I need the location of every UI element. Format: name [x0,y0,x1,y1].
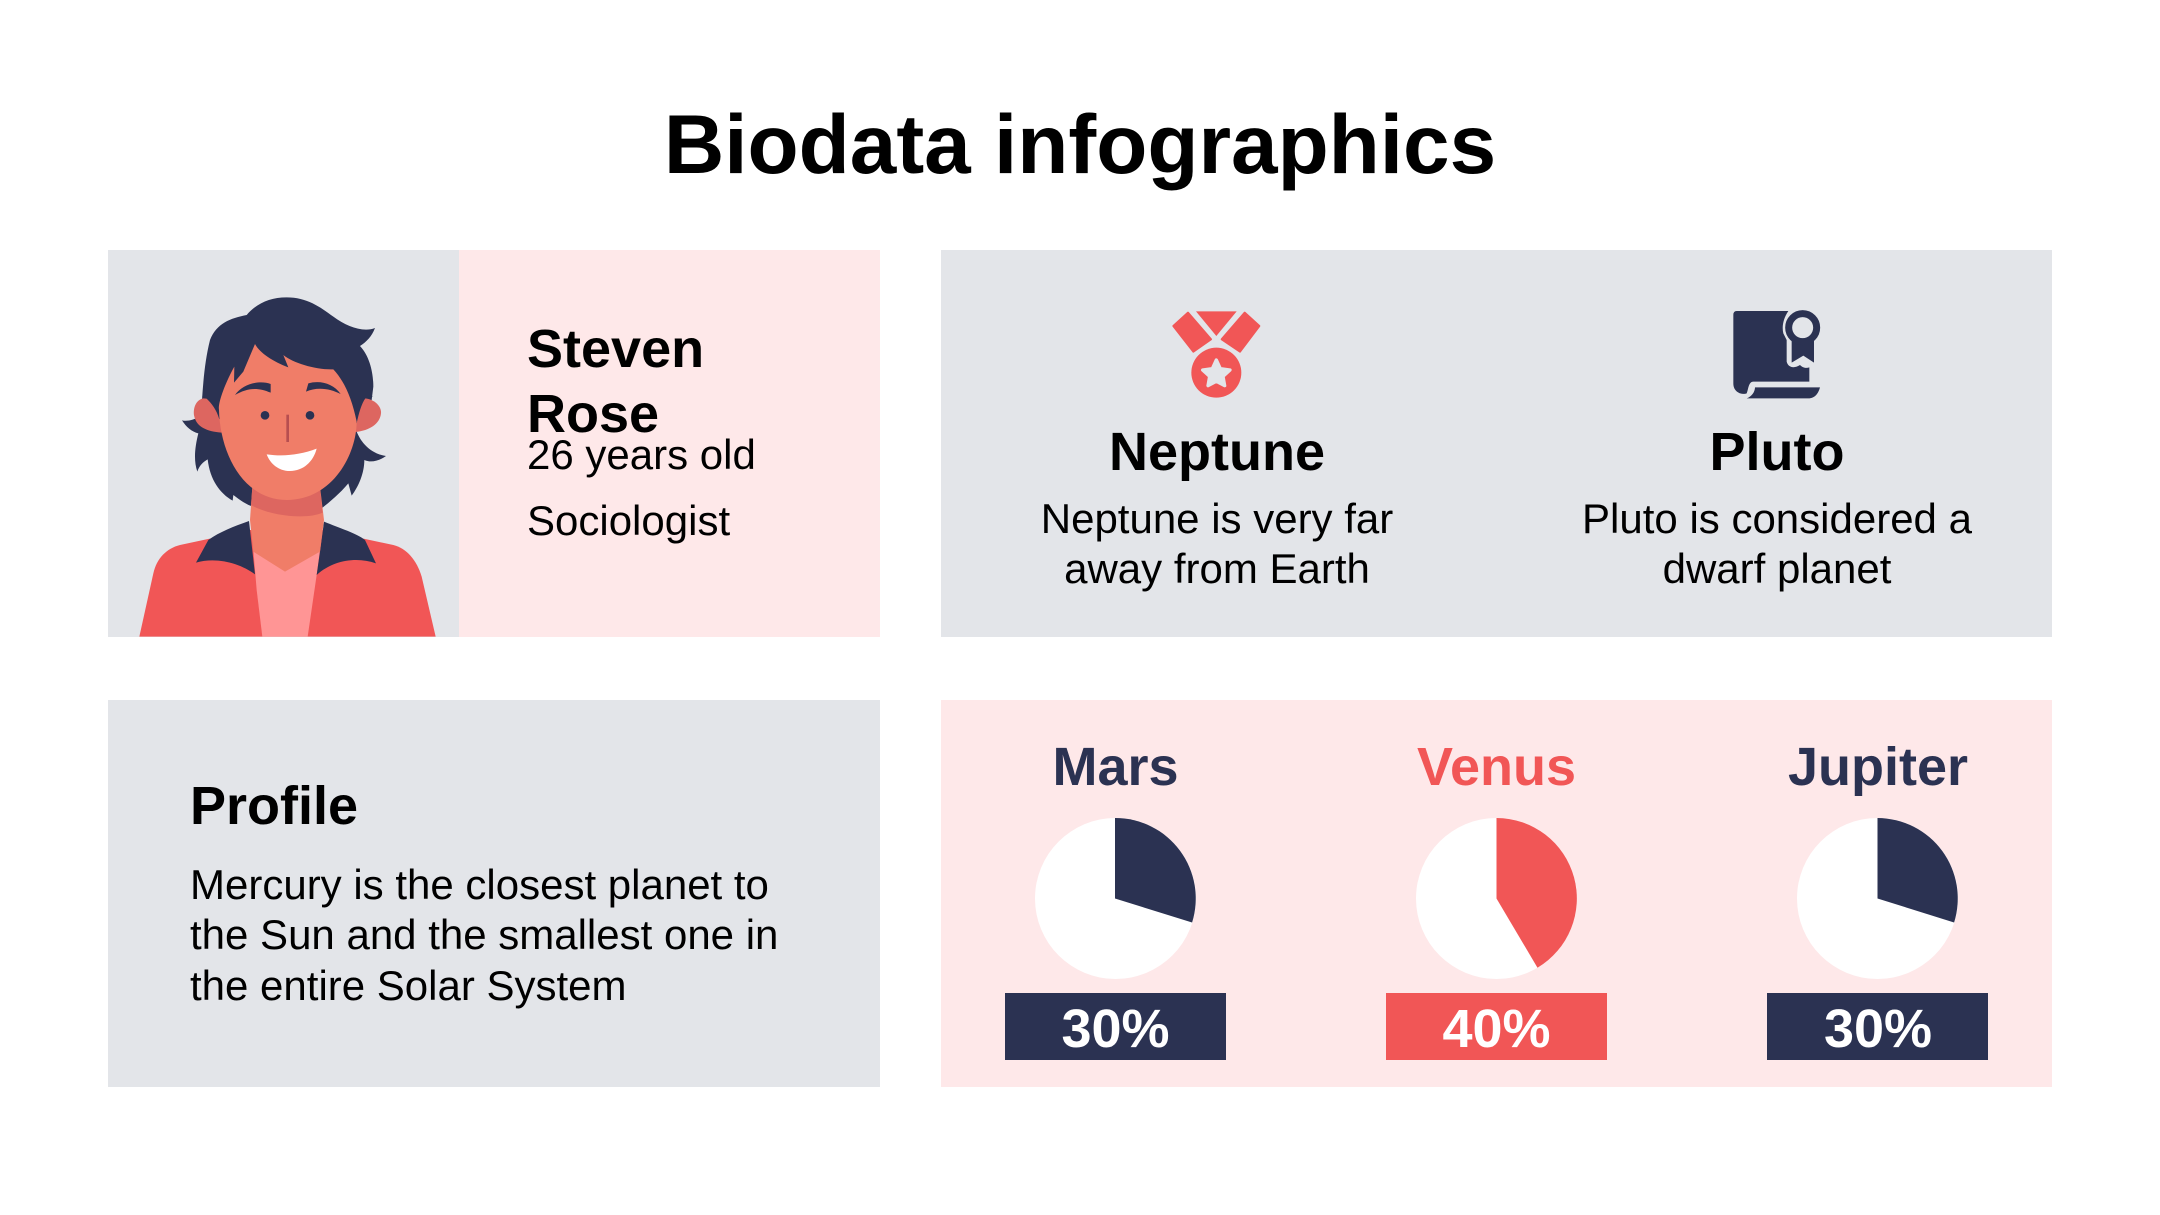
Pluto heading: Pluto [1710,422,1844,482]
chart: Jupiter [1767,737,1988,1060]
icon: diploma book with seal [1733,311,1820,398]
portrait background [108,250,459,637]
profile description: the entire Solar System [190,962,627,1009]
panel: pie charts [941,700,2052,1087]
achievements background [941,250,2052,637]
chart: Jupiter: 30% [1824,999,1932,1059]
chart: Venus: 40% [1442,999,1551,1059]
panel: profile [108,700,880,1087]
Neptune description: away from Earth [1064,545,1370,592]
Pluto description [1582,495,1973,592]
profile description: Mercury is the closest planet to [190,861,769,908]
chart: Jupiter: Jupiter [1788,737,1968,797]
illustration: smiling person portrait [139,297,436,637]
name: Rose [527,384,659,444]
chart: Mars: Mars [1052,737,1179,797]
chart: Venus: Venus [1417,737,1576,797]
Pluto description: dwarf planet [1663,545,1892,592]
name: Steven [527,319,704,379]
occupation: Sociologist [527,497,730,544]
Neptune heading: Neptune [1109,422,1325,482]
age: 26 years old [527,431,756,478]
chart: Mars [1005,737,1226,1060]
Neptune description: Neptune is very far [1041,495,1393,542]
Neptune description [1041,495,1393,592]
title: Biodata infographics [664,97,1496,191]
profile background [108,700,880,1087]
Pluto description: Pluto is considered a [1582,495,1973,542]
profile description [190,861,778,1009]
panel: person card [108,250,880,637]
name [527,319,704,444]
panel: achievements [941,250,2052,637]
charts background [941,700,2052,1087]
chart: Venus [1386,737,1607,1060]
profile description: the Sun and the smallest one in [190,911,778,958]
profile heading: Profile [190,776,358,836]
icon: medal [1173,311,1259,398]
info background [459,250,880,637]
chart: Mars: 30% [1061,999,1170,1059]
